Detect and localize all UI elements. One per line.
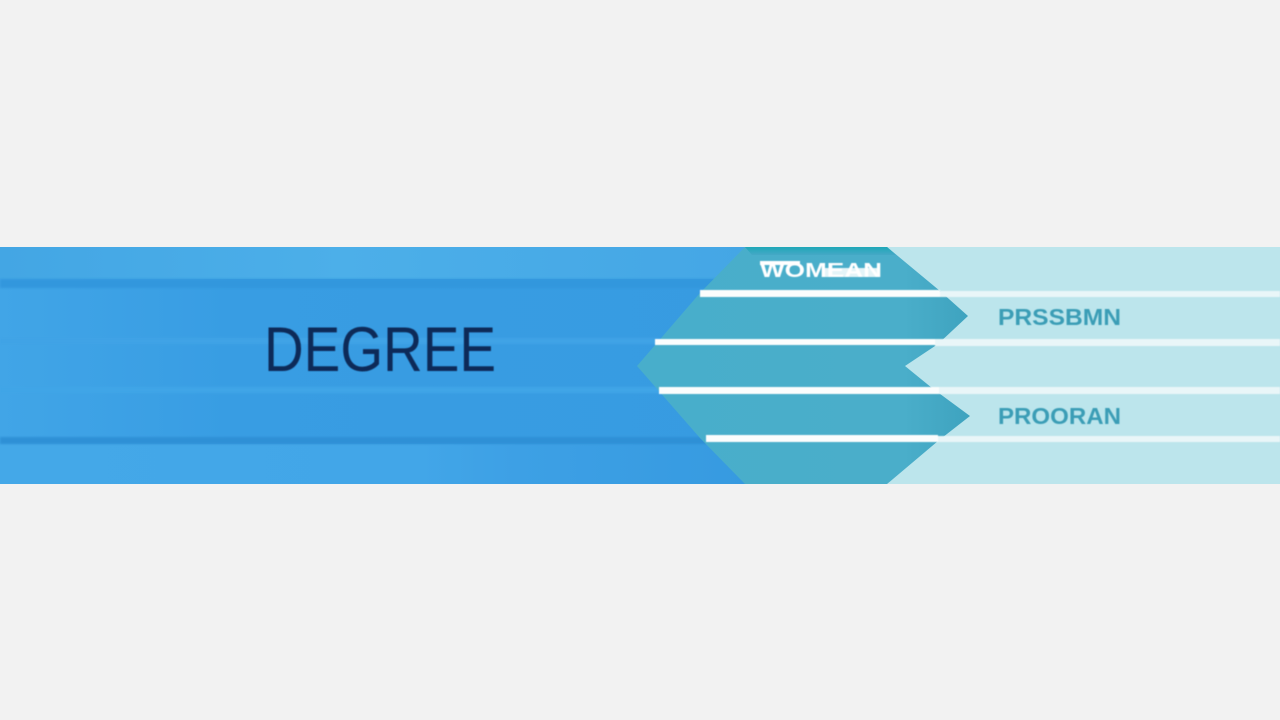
panel: degree blue band: [0, 247, 760, 484]
label: PRSSBMN: PRSSBMN: [998, 304, 1121, 330]
panel: teal arrow shape: [637, 247, 970, 484]
heading: DEGREE: DEGREE: [264, 315, 496, 385]
label: PROORAN: PROORAN: [998, 403, 1121, 429]
panel: program pale band: [860, 247, 1280, 484]
label: top teal tab: WOMEAN: [760, 260, 882, 282]
teal arrow top accent: [745, 247, 896, 255]
white divider stripes: [655, 290, 1280, 442]
